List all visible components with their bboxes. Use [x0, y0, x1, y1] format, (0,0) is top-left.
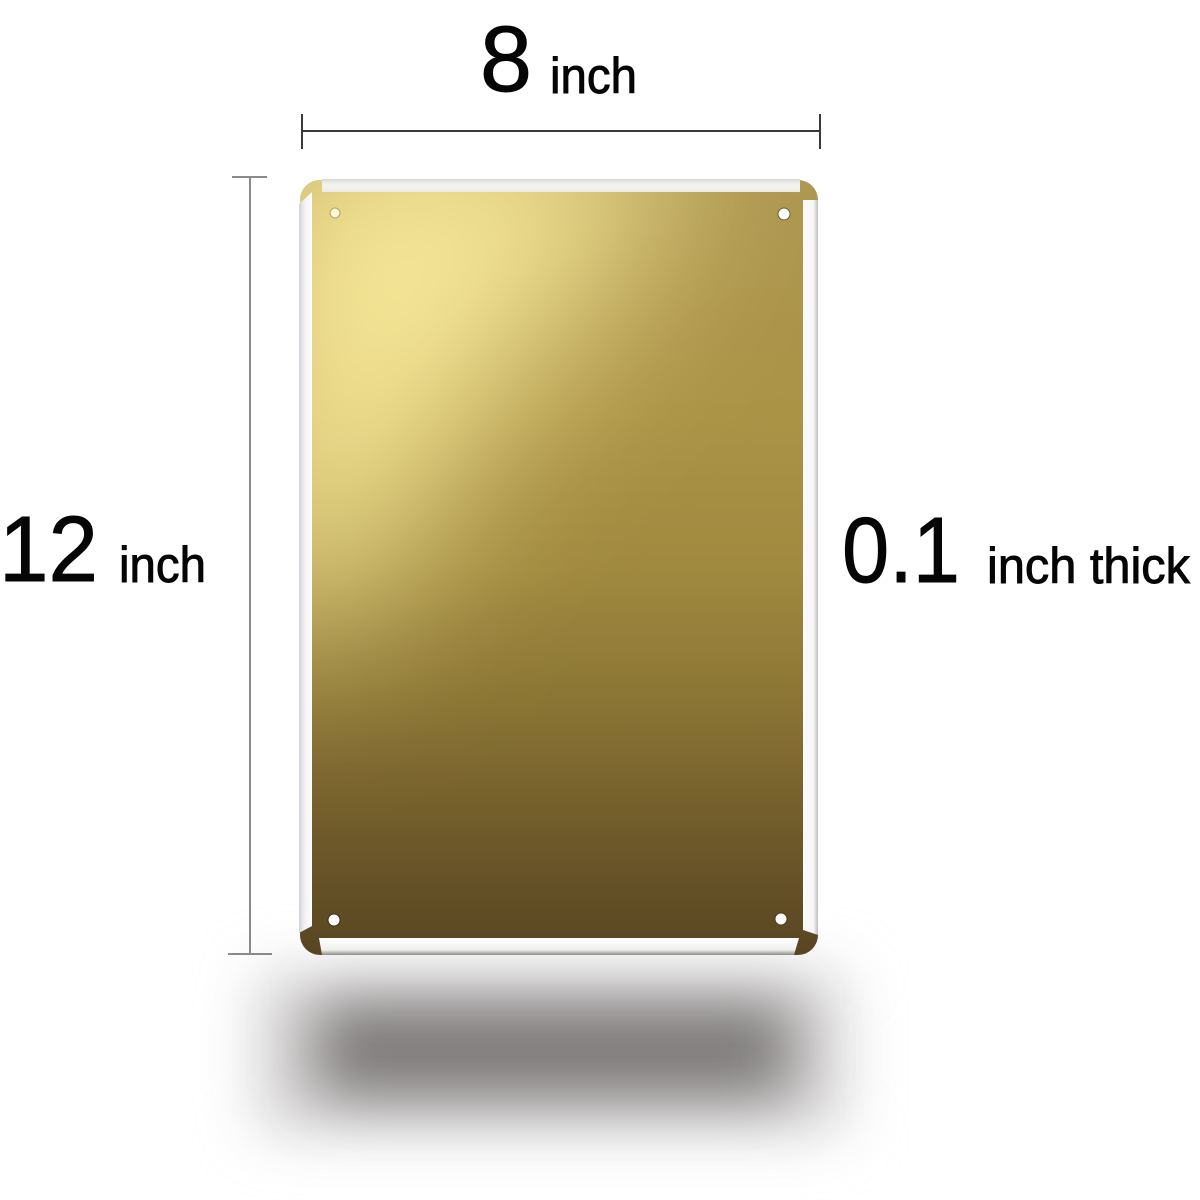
- mounting hole: bottom right: [775, 913, 787, 925]
- metal sign plate: [299, 179, 818, 955]
- gold plate face: [300, 180, 818, 955]
- height dimension line: [228, 177, 272, 954]
- rim: top: [322, 179, 800, 192]
- label: 12 inch: 12: [0, 497, 98, 601]
- mounting hole: top right: [778, 208, 790, 220]
- label: 0.1 inch thick: 0.1: [842, 498, 960, 602]
- rim: right: [803, 200, 818, 935]
- label: 12 inch: [0, 497, 206, 601]
- mounting hole: bottom left: [328, 914, 340, 926]
- label: 12 inch: inch: [119, 537, 206, 593]
- mounting hole: top left: [330, 208, 340, 218]
- shadow under plate: [258, 975, 843, 1130]
- label: 8 inch: inch: [550, 48, 637, 104]
- rim: bottom: [319, 938, 799, 955]
- width dimension line: [302, 114, 820, 149]
- label: 0.1 inch thick: inch thick: [987, 538, 1191, 594]
- label: 0.1 inch thick: [842, 498, 1191, 602]
- label: 8 inch: [480, 7, 637, 111]
- rim: left: [299, 192, 312, 933]
- label: 8 inch: 8: [480, 7, 532, 111]
